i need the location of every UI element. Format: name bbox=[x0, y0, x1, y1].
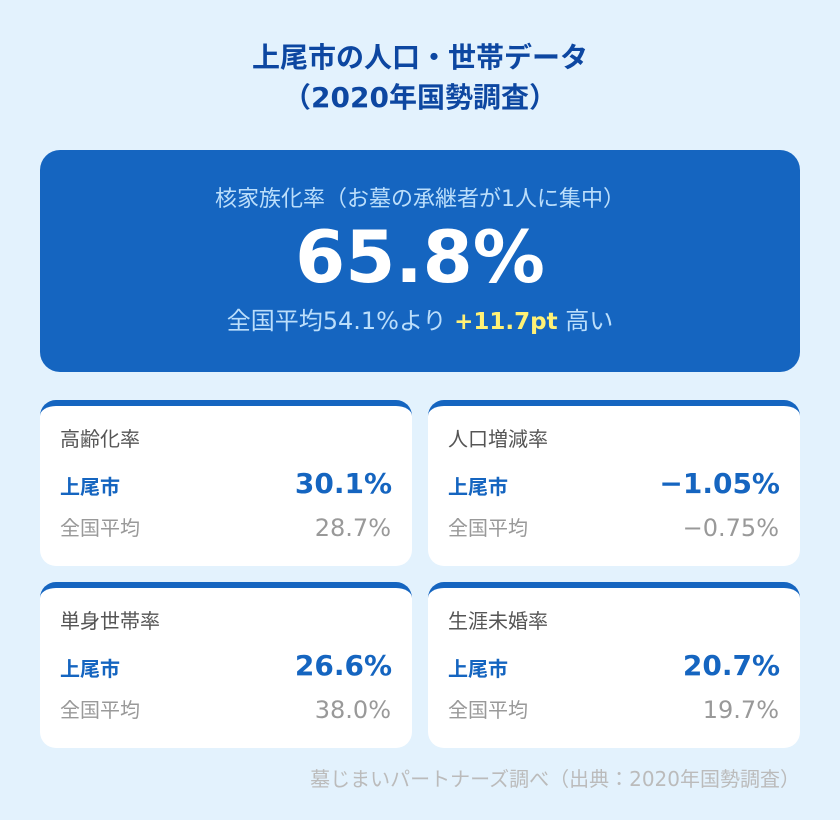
city value: 20.7% bbox=[683, 649, 780, 682]
national value: 19.7% bbox=[703, 696, 779, 724]
title: 上尾市の人口・世帯データ bbox=[252, 41, 588, 74]
city label: 上尾市 bbox=[60, 475, 120, 499]
hero value: 65.8% bbox=[295, 215, 545, 299]
panel: hero nuclear family rate bbox=[40, 150, 800, 372]
title: （2020年国勢調査） bbox=[283, 81, 557, 114]
city label: 上尾市 bbox=[60, 657, 120, 681]
panel: population change rate bbox=[428, 400, 800, 566]
national label: 全国平均 bbox=[448, 516, 528, 540]
hero comparison: 全国平均54.1%より +11.7pt 高い bbox=[227, 307, 613, 335]
panel: single household rate bbox=[40, 582, 412, 748]
hero label: 核家族化率（お墓の承継者が1人に集中） bbox=[215, 187, 625, 212]
city label: 上尾市 bbox=[448, 657, 508, 681]
panel: aging rate bbox=[40, 400, 412, 566]
card heading: 高齢化率 bbox=[60, 427, 140, 451]
national value: −0.75% bbox=[683, 514, 779, 542]
city value: −1.05% bbox=[659, 467, 780, 500]
national value: 38.0% bbox=[315, 696, 391, 724]
source note: 墓じまいパートナーズ調べ（出典：2020年国勢調査） bbox=[310, 767, 800, 791]
national value: 28.7% bbox=[315, 514, 391, 542]
national label: 全国平均 bbox=[448, 698, 528, 722]
city label: 上尾市 bbox=[448, 475, 508, 499]
title bbox=[252, 41, 588, 114]
card heading: 人口増減率 bbox=[448, 427, 548, 451]
card heading: 生涯未婚率 bbox=[448, 609, 548, 633]
national label: 全国平均 bbox=[60, 516, 140, 540]
city value: 30.1% bbox=[295, 467, 392, 500]
city value: 26.6% bbox=[295, 649, 392, 682]
national label: 全国平均 bbox=[60, 698, 140, 722]
panel: lifetime unmarried rate bbox=[428, 582, 800, 748]
card heading: 単身世帯率 bbox=[60, 609, 160, 633]
